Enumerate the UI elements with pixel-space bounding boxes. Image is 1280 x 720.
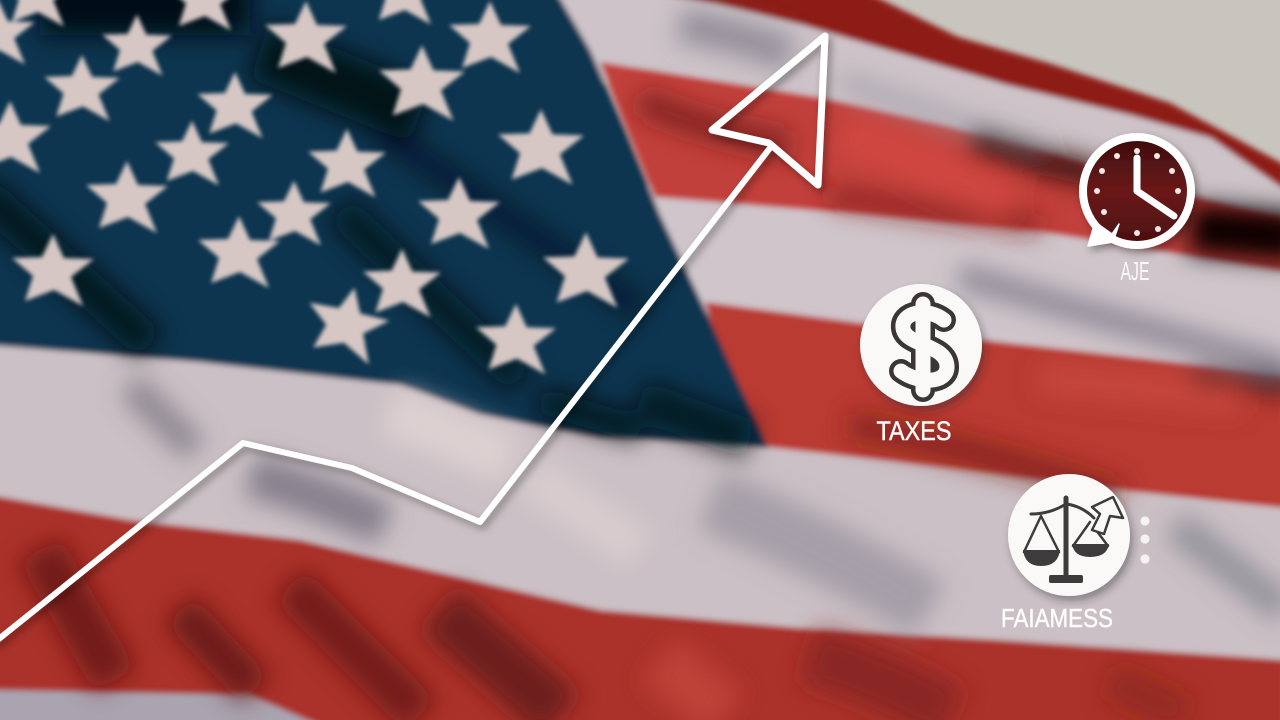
clock label: AJE: [1120, 256, 1150, 286]
canton: stars: [0, 0, 629, 374]
upper stripe shading: [640, 25, 1280, 495]
taxes label: TAXES: [876, 416, 952, 446]
arrow head: [712, 36, 825, 185]
stripe: bottom corner white: [0, 680, 340, 720]
scales right pan: [1072, 544, 1109, 557]
rising trend arrow: [0, 36, 825, 642]
clock ring: [1083, 137, 1191, 245]
fairness label: FAIAMESS: [1001, 603, 1113, 633]
scales arrow: [1092, 497, 1123, 534]
scales base: [1049, 575, 1083, 583]
dollar sign outline: [901, 304, 947, 390]
stripe: upper white: [540, 0, 1280, 240]
clock speech tail: [1088, 222, 1119, 246]
dollar circle: [860, 284, 982, 406]
scales circle: [1008, 474, 1130, 596]
clock hour ticks: [1094, 148, 1181, 236]
clock hands: [1137, 158, 1174, 216]
clock face: [1083, 137, 1191, 245]
canton: navy field: [0, 0, 768, 448]
stripe: top dark red: [640, 0, 1280, 190]
arrow line: [0, 148, 770, 642]
icon: clock: [1083, 137, 1191, 246]
scales side dots: [1140, 516, 1150, 564]
scales post and beam: [1024, 498, 1108, 578]
stripe: bottom red: [0, 495, 1280, 720]
scales left pan: [1023, 550, 1060, 566]
icon: scales badge: [1008, 474, 1130, 596]
stripe: second white: [640, 185, 1280, 385]
stripe: second red: [600, 62, 1280, 272]
large white stripe ripples: [130, 385, 1280, 610]
stripe: large white: [0, 330, 1280, 670]
canton: dark folds: [0, 0, 750, 440]
bottom red stripe folds: [40, 550, 1185, 715]
icon: dollar badge: [860, 284, 982, 406]
stripe: third red: [705, 302, 1280, 508]
dollar sign fill: [901, 304, 947, 390]
